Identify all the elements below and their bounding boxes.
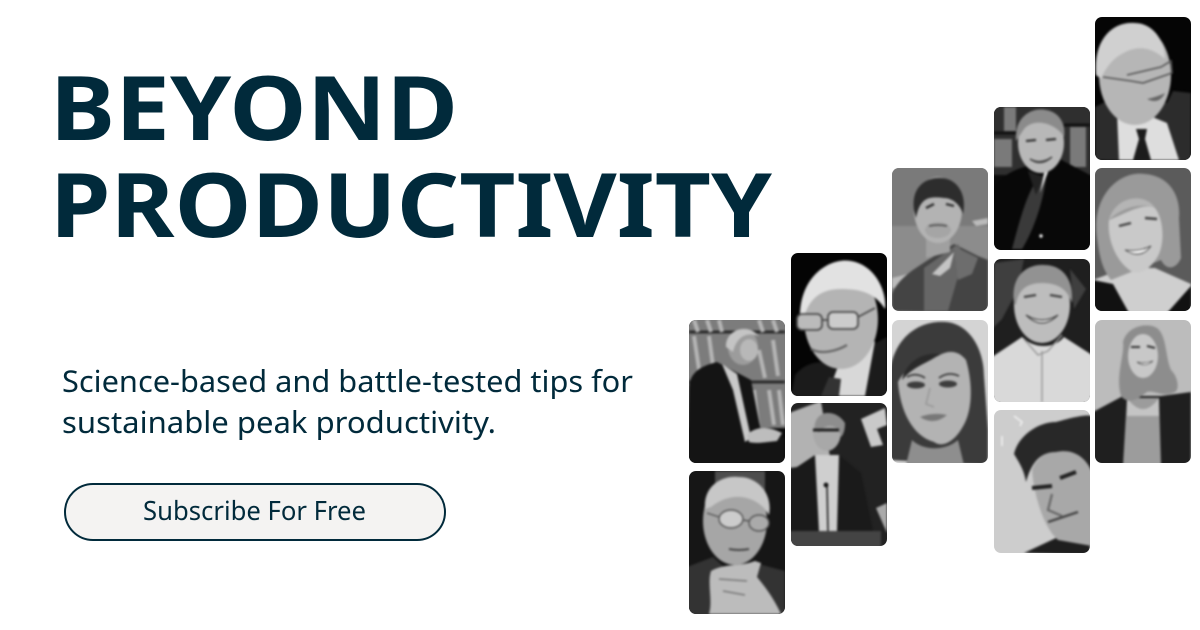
subscribe button (64, 483, 446, 541)
portrait: man looking up in outdoor jacket (892, 168, 988, 311)
portrait: speaker before bookshelves (689, 320, 785, 463)
portrait grid (689, 17, 1191, 614)
portrait: white-haired man in suit and dark tie (1095, 17, 1191, 160)
title (50, 46, 772, 260)
subtitle: Science-based and battle-tested tips for (62, 360, 633, 401)
portrait: woman with long dark hair (892, 320, 988, 463)
portrait: white-haired man with glasses and dotted tie (791, 253, 887, 396)
subtitle (62, 360, 633, 442)
portrait: woman with wavy hair in dark blazer (1095, 320, 1191, 463)
portrait: elderly man with glasses and hand on chin (689, 471, 785, 614)
title: BEYOND (50, 46, 458, 167)
portrait: man at a podium with microphone (791, 403, 887, 546)
portrait: smiling woman with shoulder-length hair (1095, 168, 1191, 311)
portrait: man with dark hair against pale wall (994, 410, 1090, 553)
portrait: man in black suit before bookshelves (994, 107, 1090, 250)
subscribe button: Subscribe For Free (143, 492, 366, 528)
subtitle: sustainable peak productivity. (62, 401, 496, 442)
portrait: smiling man in light shirt (994, 259, 1090, 402)
